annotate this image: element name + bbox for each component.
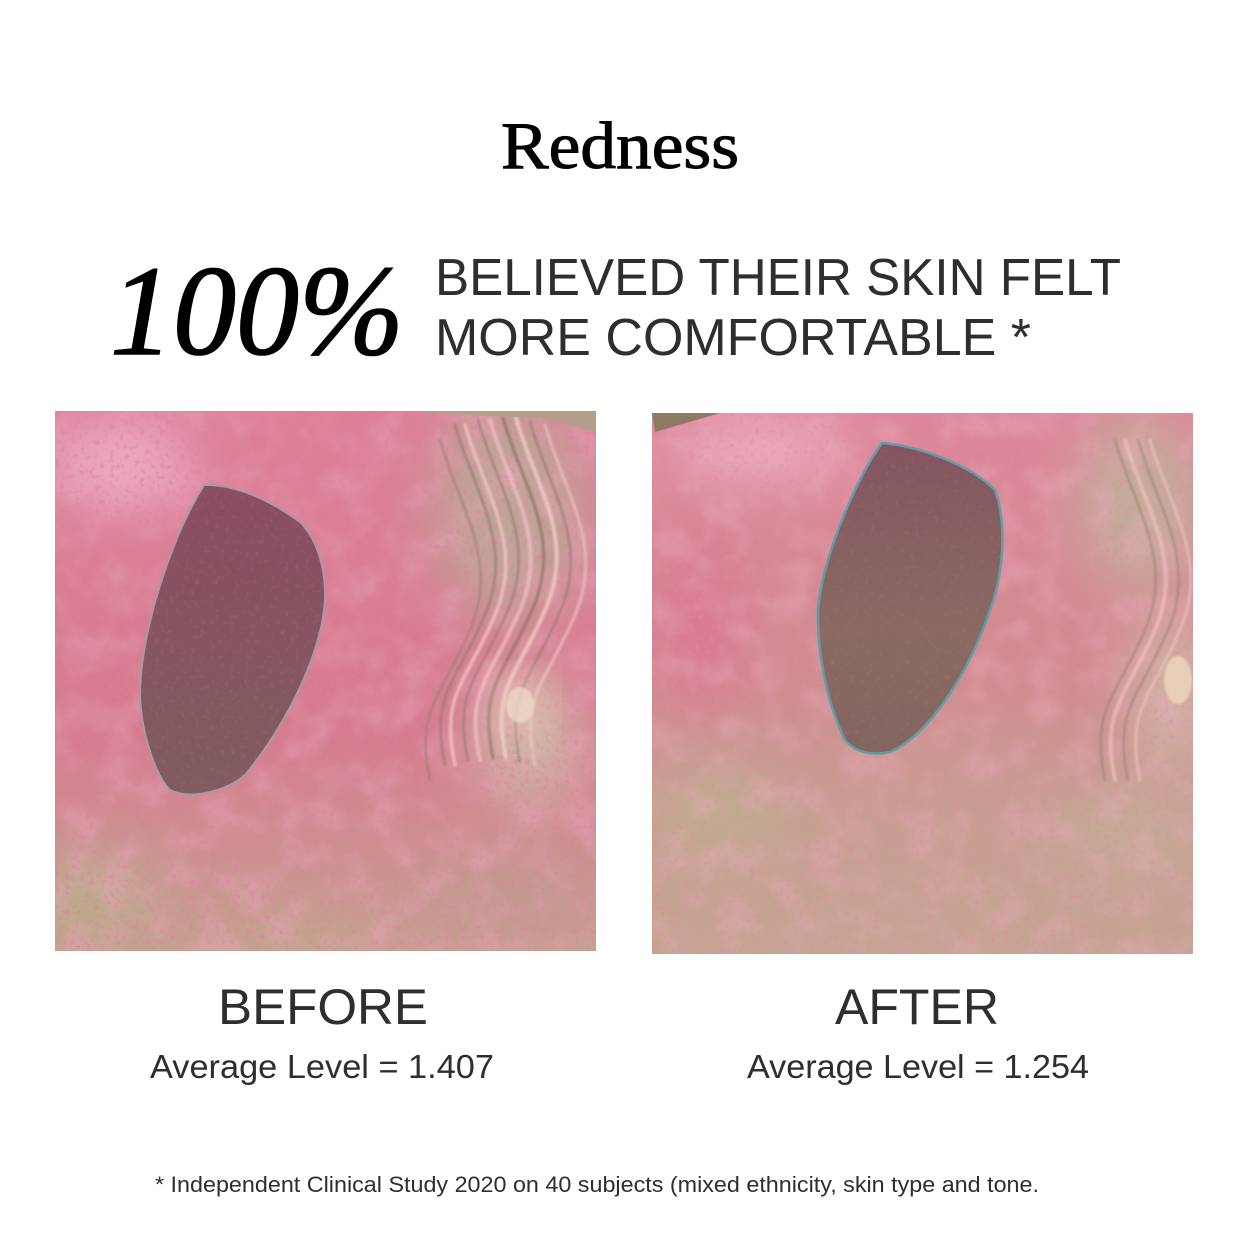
wrinkles — [426, 418, 586, 780]
headline statement — [435, 249, 1121, 367]
label: before: BEFORE — [218, 979, 428, 1035]
headline statement: BELIEVED THEIR SKIN FELT — [435, 249, 1121, 307]
title: Redness — [501, 109, 739, 183]
label: after: AFTER — [835, 979, 999, 1035]
wrinkles — [1101, 440, 1191, 780]
highlighted region: after — [812, 440, 1007, 756]
statistic: 100%: 100% — [110, 240, 404, 382]
label: before: Average Level = 1.407 — [150, 1048, 494, 1085]
label: after: Average Level = 1.254 — [747, 1048, 1089, 1085]
highlighted region: before — [135, 480, 330, 800]
panel: after photo — [652, 410, 1205, 954]
label: before — [150, 979, 494, 1085]
headline statement: MORE COMFORTABLE * — [435, 309, 1031, 367]
footnote: * Independent Clinical Study 2020 on 40 subjects (mixed ethnicity, skin type and tone. — [155, 1172, 1039, 1197]
label: after — [747, 979, 1089, 1085]
panel: before photo — [55, 411, 596, 951]
